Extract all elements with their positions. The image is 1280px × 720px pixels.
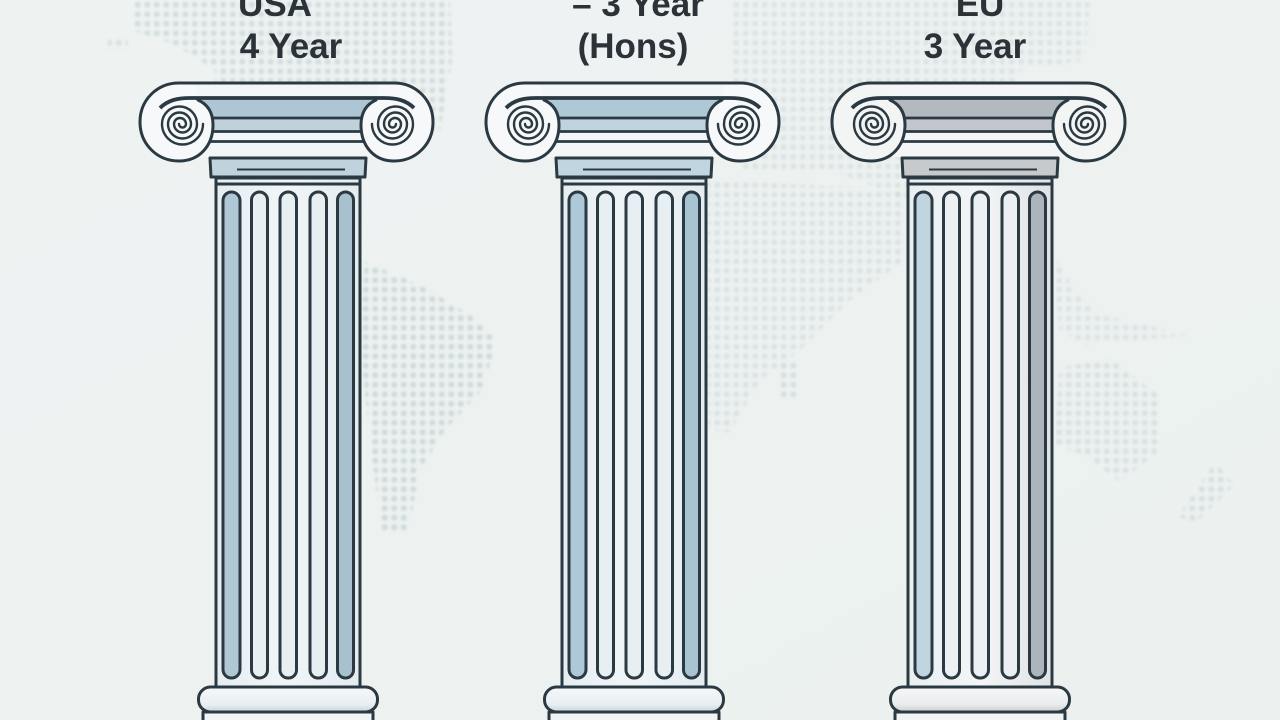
icon: right scroll spiral (1064, 106, 1105, 144)
icon: right scroll spiral (372, 106, 413, 144)
world map: dotted background (108, 0, 1234, 532)
shaft (908, 178, 1052, 688)
capital (832, 83, 1125, 177)
icon: left scroll spiral (854, 106, 895, 144)
map: New Zealand (1178, 462, 1234, 524)
icon: right scroll spiral (718, 106, 759, 144)
heading: EU 3 Year: 3 Year (924, 27, 1027, 66)
base (198, 687, 378, 720)
base (890, 687, 1070, 720)
icon: left scroll spiral (508, 106, 549, 144)
shaft (216, 178, 360, 688)
column: USA (140, 0, 433, 720)
map: Europe and Asia (730, 0, 1090, 200)
shaft (562, 178, 706, 688)
heading: 3 Year Hons (572, 0, 704, 66)
base (544, 687, 724, 720)
capital (140, 83, 433, 177)
heading: USA 4 Year: 4 Year (240, 27, 343, 66)
icon: left scroll spiral (162, 106, 203, 144)
map: island (778, 362, 800, 400)
column: EU (832, 0, 1125, 720)
capital (486, 83, 779, 177)
map: North America (132, 0, 452, 130)
column: UK (486, 0, 779, 720)
map: Africa (708, 180, 905, 432)
heading: EU 3 Year (924, 0, 1027, 66)
map: South-East Asia (1050, 250, 1190, 345)
map: far-west island (108, 38, 128, 50)
heading: 3 Year Hons: (Hons) (578, 27, 688, 66)
map: South America (360, 262, 497, 532)
heading: USA 4 Year (238, 0, 343, 66)
map: Australia (1055, 358, 1160, 482)
